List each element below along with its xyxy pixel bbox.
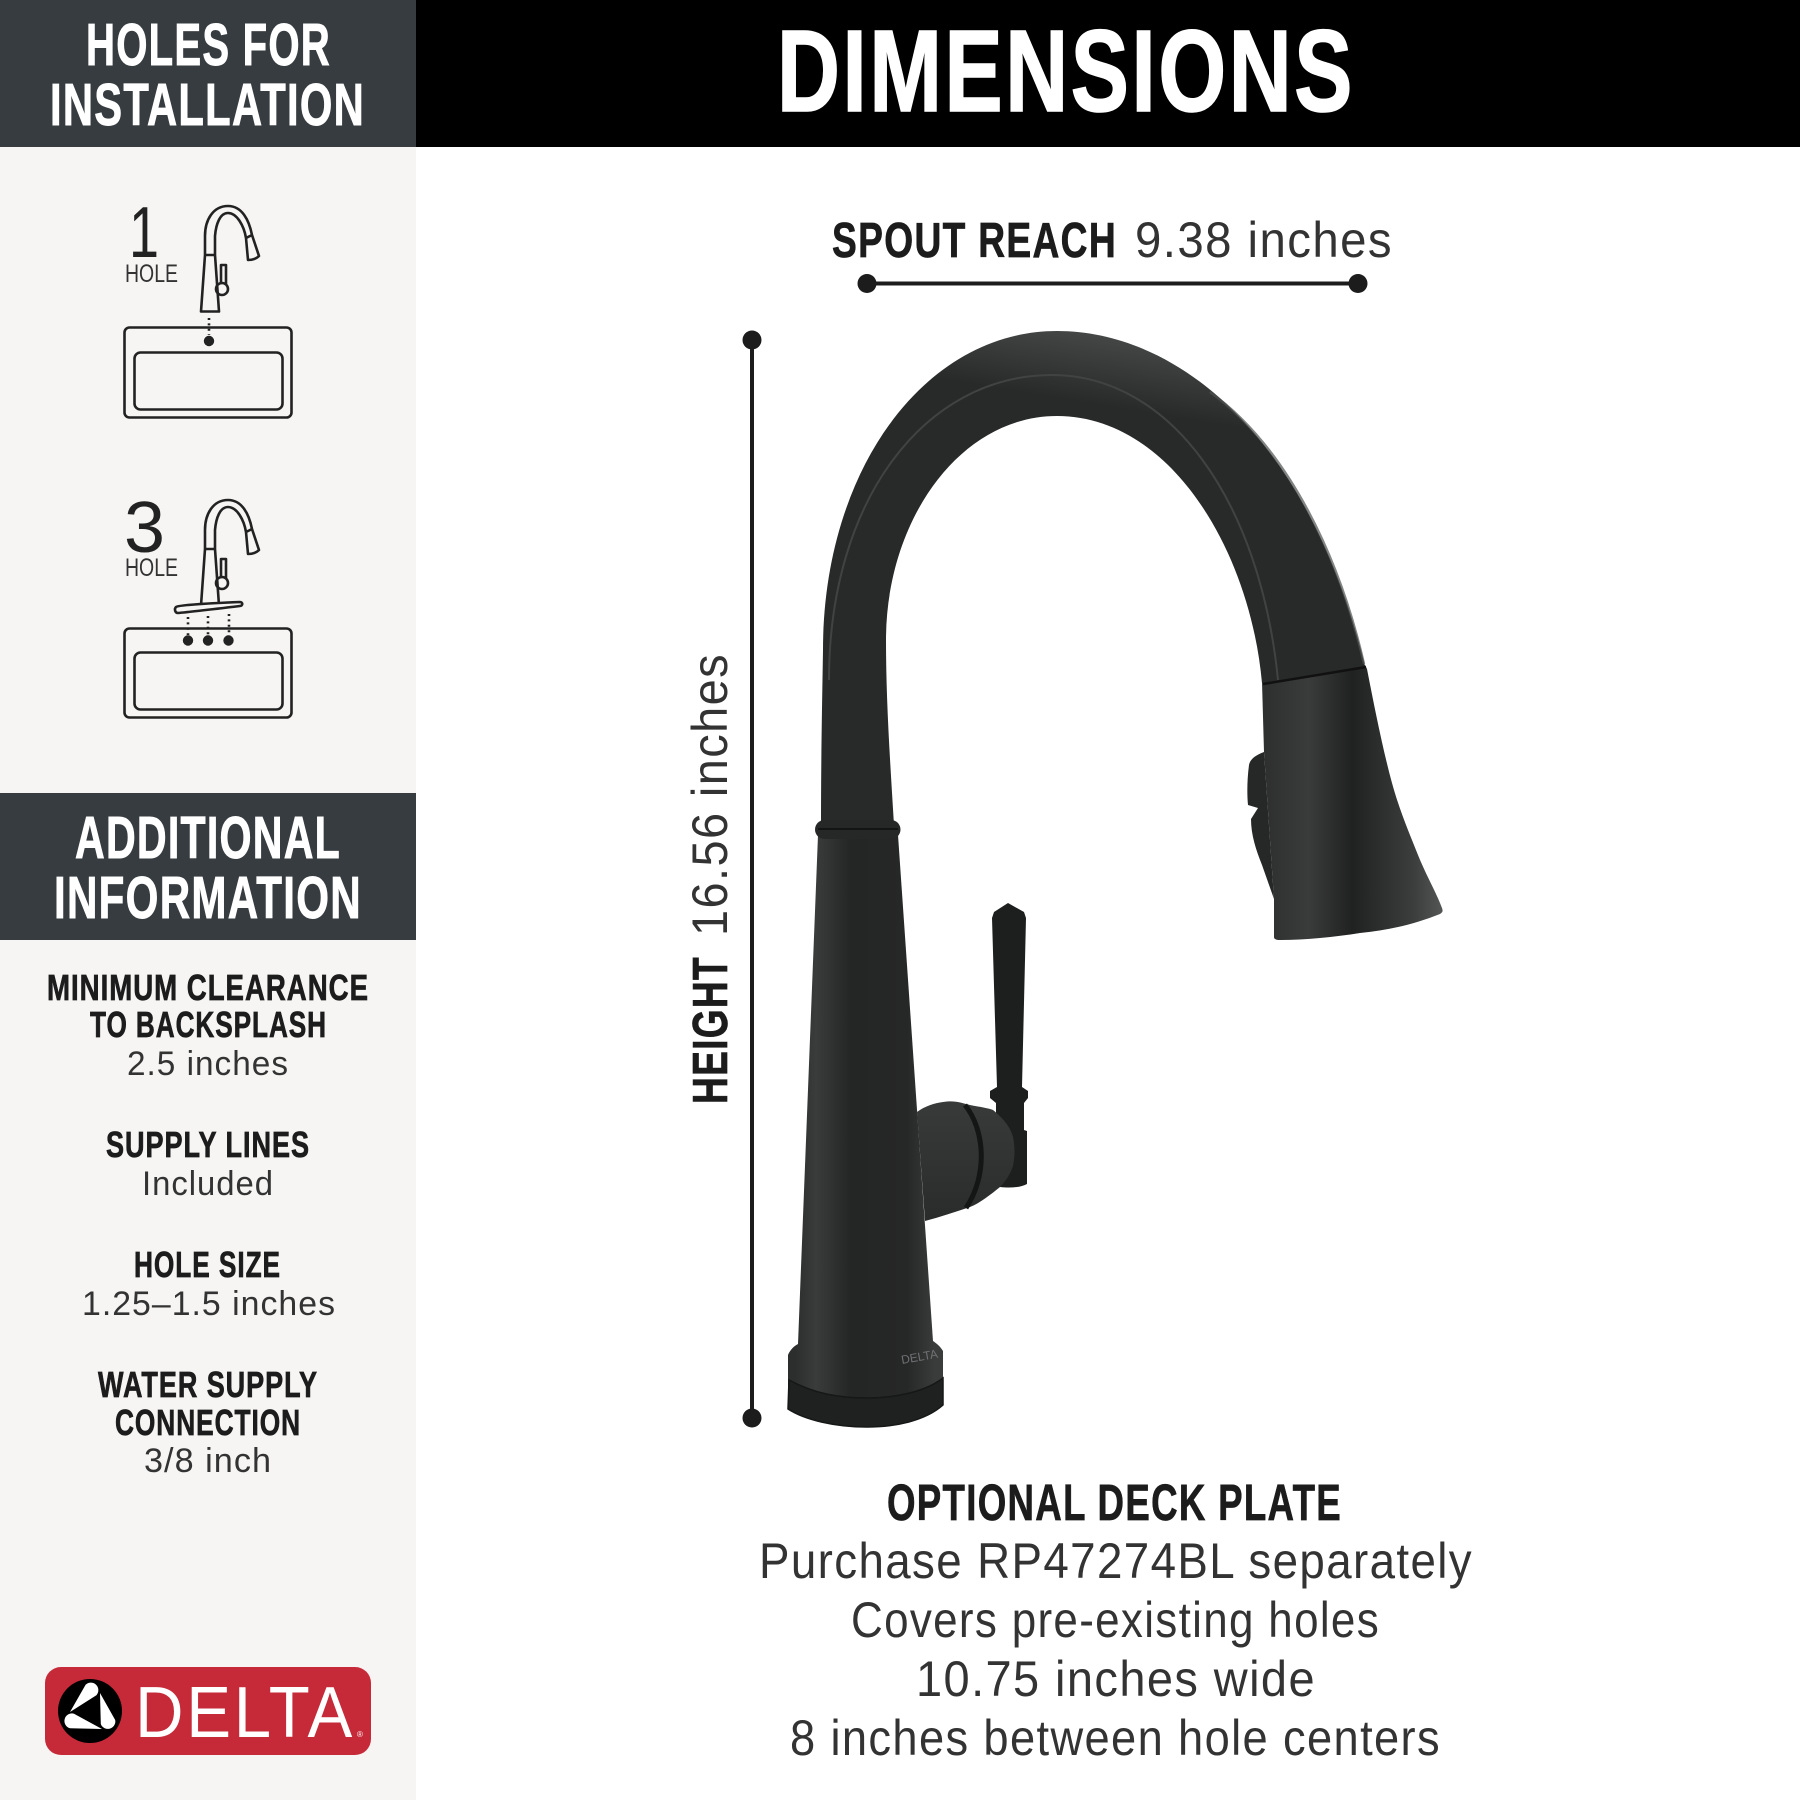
text block: hole size: 1.25–1.5 inches — [82, 1285, 336, 1323]
base logotype: DELTA — [900, 1347, 939, 1367]
header: holes for installation: HOLES FOR — [86, 12, 331, 78]
text block: minimum clearance: 2.5 inches — [127, 1045, 289, 1083]
dimension: spout reach: 9.38 inches — [1135, 212, 1393, 268]
lever cylinder — [917, 1101, 1014, 1221]
text block: minimum clearance: TO BACKSPLASH — [90, 1004, 327, 1045]
text block: optional deck plate — [759, 1474, 1473, 1766]
text block: water supply connection: 3/8 inch — [144, 1442, 272, 1480]
lever handle — [990, 903, 1028, 1188]
dimension: spout reach — [832, 212, 1393, 293]
title banner: dimensions — [416, 0, 1800, 147]
text block: water supply connection: CONNECTION — [115, 1402, 301, 1443]
dimension: height — [682, 330, 762, 1428]
dimension: height: 16.56 inches — [682, 653, 738, 936]
header: additional information: INFORMATION — [54, 865, 362, 931]
text block: minimum clearance — [47, 967, 369, 1083]
text block: optional deck plate: 10.75 inches wide — [916, 1651, 1316, 1707]
icon: 3 hole installation — [124, 488, 292, 718]
faucet — [788, 331, 1443, 1427]
head junction line — [1263, 667, 1366, 684]
text block: optional deck plate: OPTIONAL DECK PLATE — [887, 1474, 1342, 1531]
spout ridge highlight — [829, 375, 1278, 680]
collar — [815, 820, 900, 839]
logo: Delta: DELTA — [135, 1673, 355, 1753]
icon: 3 hole installation: 3 — [124, 488, 165, 568]
pull-down head — [1262, 665, 1443, 940]
header: additional information — [0, 793, 416, 940]
header: additional information: ADDITIONAL — [75, 805, 341, 871]
text block: optional deck plate: Purchase RP47274BL separately — [759, 1533, 1473, 1589]
faucet body — [788, 835, 943, 1427]
text block: optional deck plate: Covers pre-existing holes — [851, 1592, 1380, 1648]
logo: Delta: ® — [357, 1730, 363, 1739]
text block: water supply connection: WATER SUPPLY — [98, 1364, 318, 1405]
logo: Delta — [45, 1667, 371, 1755]
header: holes for installation — [0, 0, 416, 147]
text block: hole size: HOLE SIZE — [134, 1244, 281, 1285]
text block: minimum clearance: MINIMUM CLEARANCE — [47, 967, 369, 1008]
lever ring — [965, 1105, 981, 1208]
text block: supply lines: Included — [142, 1165, 274, 1203]
title banner: dimensions: DIMENSIONS — [777, 6, 1355, 136]
text block: hole size — [82, 1244, 336, 1323]
left panel background — [0, 0, 416, 1800]
spray button — [1247, 752, 1274, 899]
dimension: spout reach: SPOUT REACH — [832, 214, 1117, 268]
icon: 1 hole installation — [124, 193, 292, 418]
text block: water supply connection — [98, 1364, 318, 1480]
icon: 3 hole installation: HOLE — [125, 554, 178, 582]
spout outer edge highlight — [1210, 392, 1364, 664]
icon: 1 hole installation: HOLE — [125, 260, 178, 288]
dimension: height: HEIGHT — [684, 956, 738, 1104]
text block: optional deck plate: 8 inches between hole centers — [790, 1710, 1441, 1766]
icon: 1 hole installation: 1 — [129, 193, 159, 273]
text block: supply lines — [106, 1124, 310, 1203]
spout — [821, 331, 1365, 825]
base ring — [788, 1378, 943, 1427]
header: holes for installation: INSTALLATION — [50, 72, 365, 138]
text block: supply lines: SUPPLY LINES — [106, 1124, 310, 1165]
